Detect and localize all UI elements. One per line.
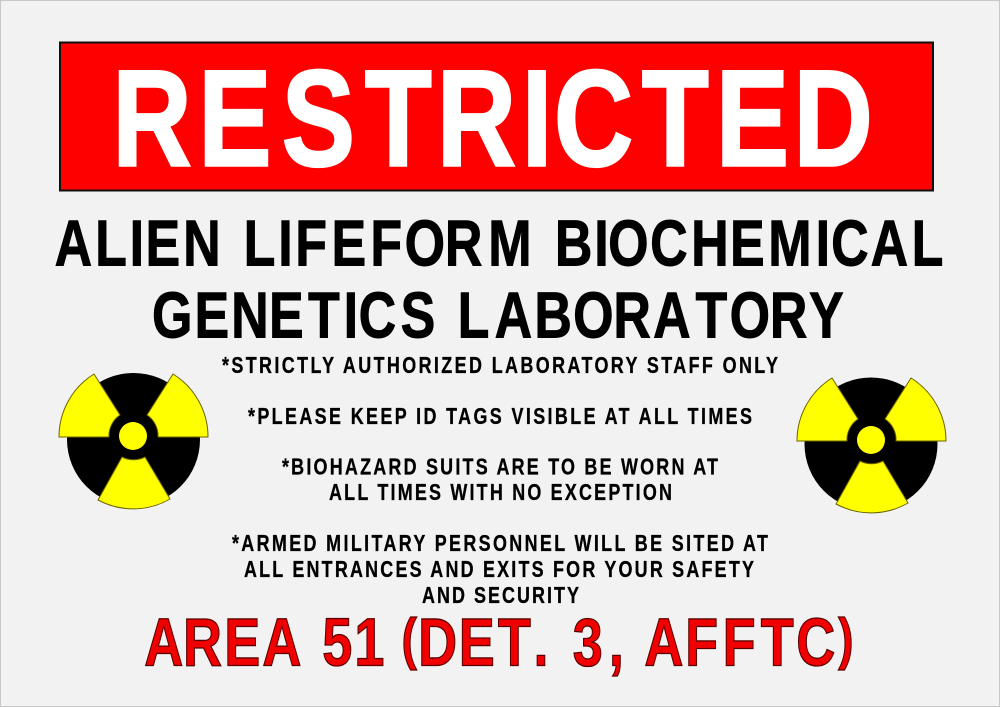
rules text block: *BIOHAZARD SUITS ARE TO BE WORN AT — [282, 454, 718, 480]
location footer: AREA 51 — [144, 605, 395, 680]
rules text block: *PLEASE KEEP ID TAGS VISIBLE AT ALL TIMES — [248, 404, 752, 430]
banner title: RESTRICTED — [112, 43, 873, 195]
rules text block — [222, 353, 778, 609]
heading: GENETICS LABORATORY — [152, 280, 844, 352]
icon: radiation symbol right — [797, 378, 946, 513]
location footer: ) — [838, 606, 853, 670]
heading: ALIEN LIFEFORM BIOCHEMICAL — [55, 208, 943, 280]
rules text block: ALL ENTRANCES AND EXITS FOR YOUR SAFETY — [244, 557, 754, 583]
location footer: ( — [402, 606, 418, 670]
location footer: DET. 3, AFFTC — [418, 605, 835, 680]
banner: restricted — [60, 42, 933, 195]
rules text block: *ARMED MILITARY PERSONNEL WILL BE SITED AT — [232, 531, 768, 557]
rules text block: AND SECURITY — [422, 583, 579, 609]
rules text block: ALL TIMES WITH NO EXCEPTION — [329, 480, 672, 506]
rules text block: *STRICTLY AUTHORIZED LABORATORY STAFF ONLY — [222, 353, 778, 379]
heading — [55, 208, 943, 352]
icon: radiation symbol left — [59, 373, 208, 509]
